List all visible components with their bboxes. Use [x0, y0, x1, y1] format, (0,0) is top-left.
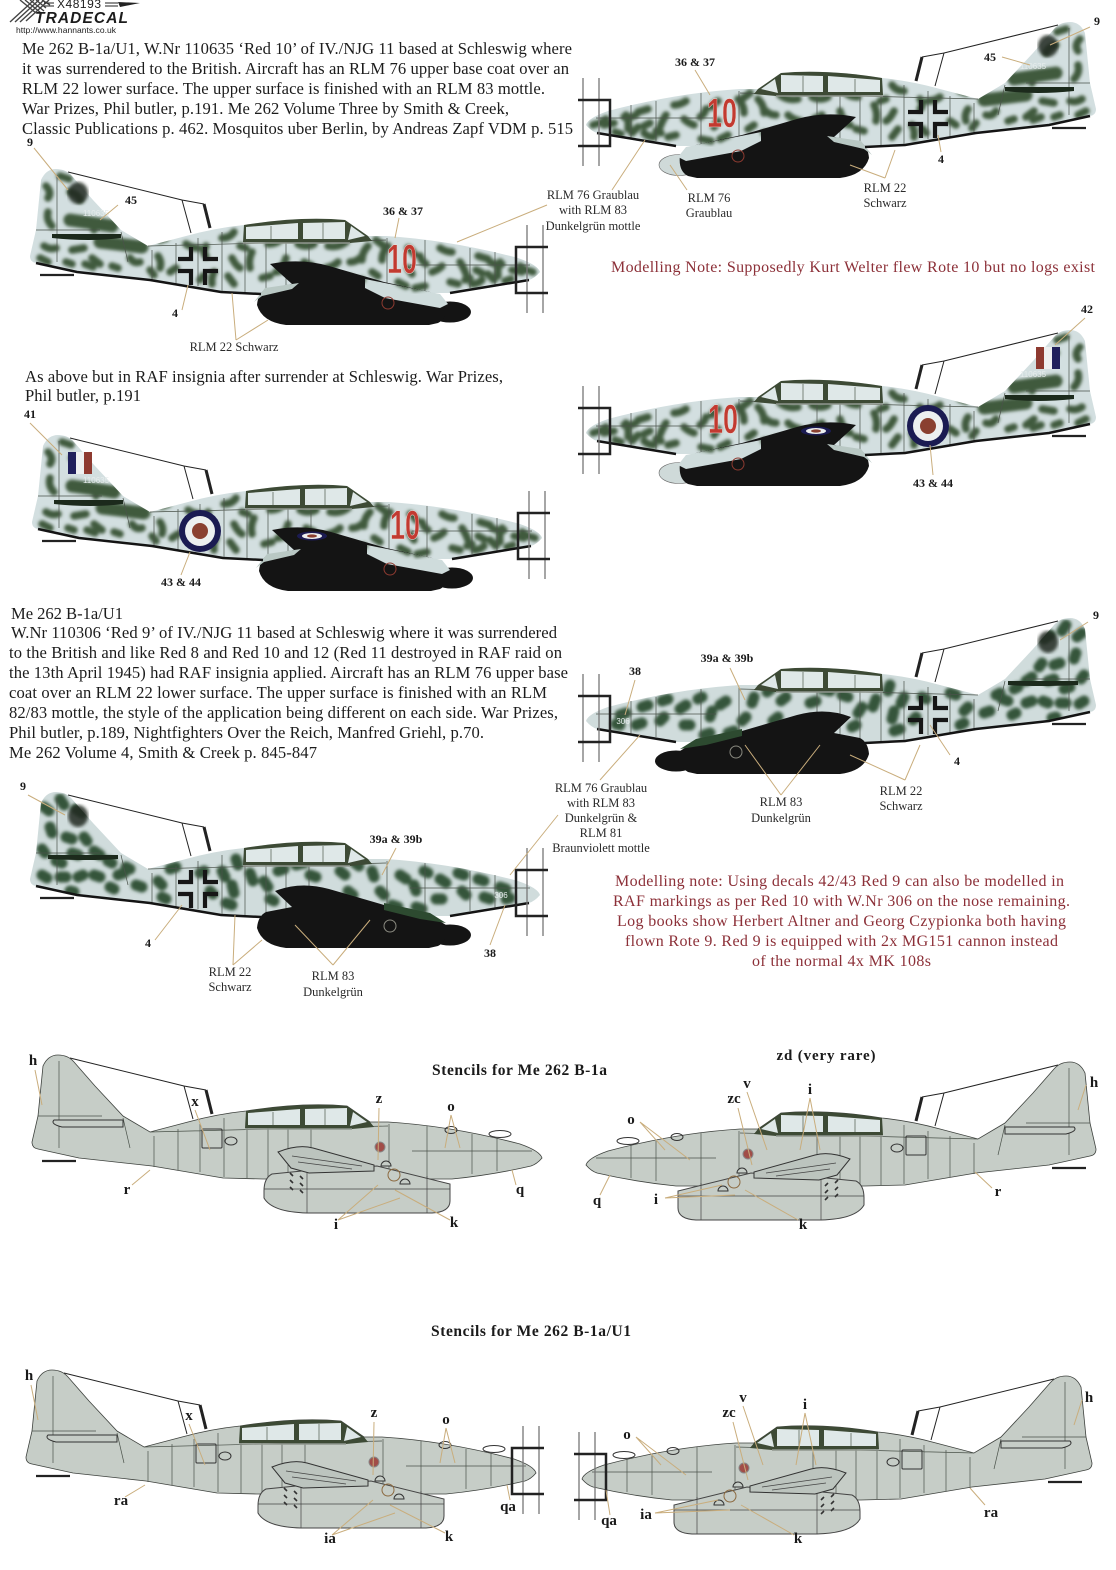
callouts: stencil B-1a left: h — [29, 1053, 38, 1069]
callouts: Red 9 left profile: 4 — [145, 936, 151, 950]
callouts: stencil B-1a left: r — [124, 1182, 131, 1198]
callouts: Red 9 left profile: Schwarz — [208, 980, 252, 994]
text block: Red 10 description: it was surrendered to the British. Aircraft has an RLM 76 upper base coat over an — [22, 59, 570, 78]
text block: RAF insignia description: Phil butler, p.191 — [25, 386, 141, 405]
callouts: Red 10 left profile: with RLM 83 — [559, 203, 627, 217]
callouts: Red 10 left profile: RLM 76 Graublau — [547, 188, 640, 202]
callouts: stencil B-1a right: q — [593, 1193, 602, 1209]
callouts: Red 9 left profile: Dunkelgrün — [303, 985, 364, 999]
callouts: stencil B-1a left: x — [191, 1094, 199, 1110]
callouts: stencil B-1a right: i — [808, 1082, 812, 1098]
callouts: Red 10 right profile: Schwarz — [863, 196, 907, 210]
aircraft: stencil B-1a right — [586, 1062, 1096, 1220]
text block: Red 9 description: Phil butler, p.189, Nightfighters Over the Reich, Manfred Griehl, p.70. — [9, 723, 484, 742]
callouts: Red 9 right profile — [552, 608, 1099, 855]
callouts: stencil B-1a right: zc — [727, 1091, 741, 1107]
callouts: Red 9 right profile: RLM 76 Graublau — [555, 781, 648, 795]
callouts: stencil B-1a right: r — [995, 1184, 1002, 1200]
callouts: RAF left profile: 41 — [24, 407, 36, 421]
modelling note: decals and Red 9: Modelling note: Using decals 42/43 Red 9 can also be modelled in — [615, 873, 1064, 890]
callouts: Red 10 right profile: 4 — [938, 152, 944, 166]
text block: Red 10 description: RLM 22 lower surface. The upper surface is finished with an RLM 83 mottle. — [22, 79, 545, 98]
callouts: stencil B-1a right: o — [627, 1112, 635, 1128]
callouts: Red 10 left profile: 45 — [125, 193, 137, 207]
callouts: stencil B-1a right: v — [743, 1076, 751, 1092]
aircraft: Red 10 right profile: 110635 — [1020, 62, 1047, 71]
callouts: stencil B-1a/U1 left: z — [371, 1405, 378, 1421]
callouts: stencil B-1a/U1 right — [601, 1390, 1094, 1547]
callouts: stencil B-1a left: k — [450, 1215, 459, 1231]
callouts: Red 10 right profile: 9 — [1094, 14, 1100, 28]
aircraft: RAF right profile — [578, 330, 1096, 486]
callouts: Red 10 left profile: 4 — [172, 306, 178, 320]
modelling note: Kurt Welter: Modelling Note: Supposedly Kurt Welter flew Rote 10 but no logs exist — [611, 259, 1096, 276]
aircraft: stencil B-1a left — [32, 1055, 542, 1213]
callouts: Red 9 left profile: RLM 22 — [209, 965, 251, 979]
modelling note: decals and Red 9: of the normal 4x MK 108s — [752, 953, 931, 970]
aircraft: Red 10 left profile — [30, 169, 548, 325]
aircraft: Red 10 left profile: 110635 — [83, 209, 110, 218]
callouts: Red 9 right profile: RLM 83 — [760, 795, 802, 809]
callouts: Red 9 right profile: Dunkelgrün & — [565, 811, 638, 825]
callouts: stencil B-1a/U1 left: o — [442, 1412, 450, 1428]
text block: Red 9 description: coat over an RLM 22 lower surface. The upper surface is finished with an RLM — [9, 683, 547, 702]
callouts: stencil B-1a/U1 right: o — [623, 1427, 631, 1443]
callouts: stencil B-1a/U1 right: qa — [601, 1513, 617, 1529]
modelling note: decals and Red 9 — [613, 873, 1070, 970]
callouts: stencil B-1a right: k — [799, 1217, 808, 1233]
callouts: stencil B-1a right: i — [654, 1192, 658, 1208]
aircraft: stencil B-1a/U1 left — [26, 1370, 544, 1528]
callouts: Red 9 right profile: Schwarz — [879, 799, 923, 813]
callouts: stencil B-1a/U1 left: ia — [324, 1531, 336, 1547]
callouts: Red 9 left profile: 9 — [20, 779, 26, 793]
callouts: stencil B-1a right — [593, 1048, 1099, 1233]
text block: RAF insignia description: As above but in RAF insignia after surrender at Schleswig. War Prizes, — [25, 367, 503, 386]
aircraft: RAF left profile: 110635 — [83, 476, 110, 485]
callouts: stencil B-1a/U1 right: v — [739, 1390, 747, 1406]
callouts: stencil B-1a/U1 right: i — [803, 1397, 807, 1413]
callouts: RAF left profile: 43 & 44 — [161, 575, 201, 589]
callouts: Red 10 left profile — [27, 135, 641, 354]
callouts: stencil B-1a left: q — [516, 1182, 525, 1198]
callouts: stencil B-1a left: z — [376, 1091, 383, 1107]
text block: RAF insignia description — [25, 367, 503, 405]
callouts: Red 10 right profile: 45 — [984, 50, 996, 64]
callouts: Red 10 left profile: 36 & 37 — [383, 204, 423, 218]
aircraft: Red 10 right profile: 10 — [707, 90, 737, 136]
callouts: Red 9 right profile: Braunviolett mottle — [552, 841, 650, 855]
text block: Red 10 description — [22, 39, 573, 138]
callouts: stencil B-1a/U1 right: zc — [722, 1405, 736, 1421]
callouts: Red 9 left profile: 38 — [484, 946, 496, 960]
callouts: Red 10 right profile — [612, 14, 1100, 220]
aircraft: RAF left profile — [32, 435, 550, 591]
callouts: RAF left profile — [24, 407, 201, 589]
text block: Red 9 description: Me 262 Volume 4, Smith & Creek p. 845-847 — [9, 743, 317, 762]
heading: stencils B-1a: Stencils for Me 262 B-1a — [432, 1062, 607, 1079]
callouts: stencil B-1a/U1 left: k — [445, 1529, 454, 1545]
text block: Red 9 description: to the British and like Red 8 and Red 10 and 12 (Red 11 destroyed in RAF raid on — [9, 643, 563, 662]
callouts: Red 10 left profile: 9 — [27, 135, 33, 149]
callouts: Red 10 right profile: 36 & 37 — [675, 55, 715, 69]
callouts: Red 10 left profile: Dunkelgrün mottle — [546, 219, 641, 233]
logo: Xtradecal — [10, 0, 140, 35]
callouts: Red 9 right profile: Dunkelgrün — [751, 811, 812, 825]
text block: Red 10 description: Classic Publications p. 462. Mosquitos uber Berlin, by Andreas Zapf VDM p. 515 — [22, 119, 573, 138]
aircraft: Red 9 left profile: 306 — [494, 891, 508, 900]
aircraft: RAF right profile: 10 — [708, 396, 738, 442]
callouts: Red 10 right profile: Graublau — [686, 206, 733, 220]
callouts: stencil B-1a/U1 left: h — [25, 1368, 34, 1384]
text block: Red 10 description: Me 262 B-1a/U1, W.Nr 110635 ‘Red 10’ of IV./NJG 11 based at Schleswig where — [22, 39, 572, 58]
callouts: Red 10 right profile: RLM 22 — [864, 181, 906, 195]
aircraft: Red 10 left profile: 10 — [387, 236, 417, 282]
callouts: Red 10 right profile: RLM 76 — [688, 191, 730, 205]
callouts: Red 9 left profile: RLM 83 — [312, 969, 354, 983]
text block: Red 9 description — [9, 604, 568, 762]
callouts: Red 9 right profile: 39a & 39b — [701, 651, 754, 665]
callouts: stencil B-1a left: o — [447, 1099, 455, 1115]
callouts: Red 9 right profile: RLM 81 — [580, 826, 622, 840]
text block: Red 9 description: 82/83 mottle, the style of the application being different on each side. War Prizes, — [9, 703, 558, 722]
callouts: Red 9 right profile: 38 — [629, 664, 641, 678]
callouts: Red 9 right profile: 4 — [954, 754, 960, 768]
aircraft: Red 9 right profile: 306 — [616, 717, 630, 726]
callouts: stencil B-1a left: i — [334, 1217, 338, 1233]
callouts: stencil B-1a right: h — [1090, 1075, 1099, 1091]
callouts: RAF right profile: 43 & 44 — [913, 476, 953, 490]
text block: Red 9 description: Me 262 B-1a/U1 — [11, 604, 123, 623]
callouts: stencil B-1a/U1 right: ia — [640, 1507, 652, 1523]
aircraft: Red 10 right profile — [578, 22, 1096, 178]
aircraft: Red 9 right profile — [578, 618, 1096, 774]
callouts: Red 9 right profile: 9 — [1093, 608, 1099, 622]
logo: Xtradecal: TRADECAL — [35, 10, 128, 27]
callouts: stencil B-1a/U1 right: k — [794, 1531, 803, 1547]
callouts: stencil B-1a/U1 left — [25, 1368, 516, 1547]
callouts: Red 10 left profile: RLM 22 Schwarz — [190, 340, 279, 354]
callouts: stencil B-1a right: zd (very rare) — [776, 1048, 876, 1064]
callouts: stencil B-1a/U1 right: ra — [984, 1505, 999, 1521]
modelling note: decals and Red 9: RAF markings as per Red 10 with W.Nr 306 on the nose remaining. — [613, 893, 1070, 910]
callouts: stencil B-1a/U1 left: ra — [114, 1493, 129, 1509]
aircraft: RAF left profile: 10 — [390, 502, 420, 548]
callouts: Red 9 left profile — [20, 779, 558, 999]
callouts: stencil B-1a/U1 left: qa — [500, 1499, 516, 1515]
text block: Red 10 description: War Prizes, Phil butler, p.191. Me 262 Volume Three by Smith & Creek, — [22, 99, 509, 118]
callouts: Red 9 right profile: with RLM 83 — [567, 796, 635, 810]
callouts: Red 9 left profile: 39a & 39b — [370, 832, 423, 846]
callouts: RAF right profile: 42 — [1081, 302, 1093, 316]
aircraft: Red 9 left profile — [30, 792, 548, 948]
modelling note: decals and Red 9: flown Rote 9. Red 9 is equipped with 2x MG151 cannon instead — [625, 933, 1058, 950]
callouts: stencil B-1a left — [29, 1053, 525, 1233]
callouts: stencil B-1a/U1 left: x — [185, 1408, 193, 1424]
text block: Red 9 description: W.Nr 110306 ‘Red 9’ of IV./NJG 11 based at Schleswig where it was surrendered — [11, 623, 558, 642]
callouts: Red 9 right profile: RLM 22 — [880, 784, 922, 798]
text block: Red 9 description: the 13th April 1945) had RAF insignia applied. Aircraft has an RLM 76 upper base — [9, 663, 568, 682]
callouts: RAF right profile — [913, 302, 1093, 490]
aircraft: RAF right profile: 110635 — [1020, 370, 1047, 379]
callouts: stencil B-1a/U1 right: h — [1085, 1390, 1094, 1406]
aircraft: stencil B-1a/U1 right — [574, 1376, 1092, 1534]
logo: Xtradecal: http://www.hannants.co.uk — [16, 25, 117, 35]
heading: stencils B-1a/U1: Stencils for Me 262 B-1a/U1 — [431, 1323, 631, 1340]
modelling note: decals and Red 9: Log books show Herbert Altner and Georg Czypionka both having — [617, 913, 1066, 930]
